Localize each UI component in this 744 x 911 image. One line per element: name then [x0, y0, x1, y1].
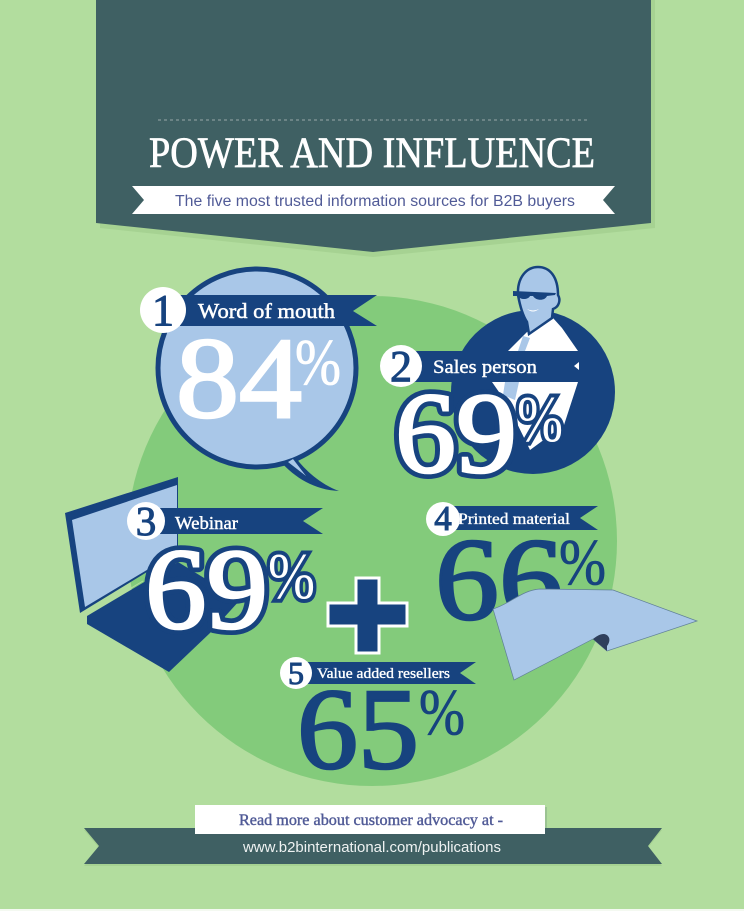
- read more box: [195, 805, 547, 836]
- value 66%: [435, 514, 606, 645]
- value 65%: [297, 666, 465, 794]
- number badge 1: [140, 286, 186, 335]
- footer link: www.b2binternational.com/publications: [242, 840, 501, 856]
- value 69%: 69: [145, 526, 268, 654]
- title: POWER AND INFLUENCE: [149, 130, 595, 177]
- ribbon label: Sales person: [433, 358, 537, 378]
- value 65%: 65: [297, 666, 419, 794]
- icon: sales person in circle: [451, 267, 615, 474]
- ribbon label: Webinar: [175, 513, 238, 533]
- item 2: sales person: [380, 267, 615, 498]
- value 69%: %: [517, 383, 563, 456]
- number badge 2: [380, 342, 422, 391]
- value 84%: 84: [176, 315, 302, 443]
- ribbon label: [180, 295, 377, 326]
- ribbon label: Value added resellers: [317, 666, 450, 682]
- large green background circle: [127, 296, 617, 786]
- value 69%: 69: [395, 370, 517, 498]
- value 69%: 69: [145, 526, 268, 654]
- read more box: Read more about customer advocacy at -: [239, 812, 503, 829]
- value 69%: %: [268, 540, 315, 613]
- ribbon label: Printed material: [458, 511, 571, 528]
- icon: plus sign: [328, 578, 407, 653]
- value 66%: 66: [435, 514, 563, 645]
- value 69%: [395, 370, 563, 498]
- number badge 5: [280, 655, 312, 691]
- number badge 1: 1: [152, 286, 174, 335]
- value 69%: [145, 526, 315, 654]
- icon: laptop: [65, 477, 240, 672]
- number badge 2: 2: [390, 342, 412, 391]
- footer ribbon: [84, 805, 662, 866]
- number badge 5: 5: [288, 655, 304, 691]
- ribbon label: [445, 506, 598, 530]
- ribbon label: [160, 508, 323, 534]
- value 69%: 69: [395, 370, 517, 498]
- number badge 3: [127, 498, 165, 544]
- number badge 3: 3: [136, 498, 156, 544]
- ribbon label: [305, 662, 476, 684]
- subtitle ribbon: [132, 186, 615, 214]
- header banner: [96, 0, 655, 257]
- ribbon label: [410, 351, 579, 382]
- value 65%: %: [419, 676, 465, 749]
- item 3: webinar: [65, 477, 323, 672]
- icon: open document: [493, 589, 697, 680]
- icon: speech bubble: [158, 269, 356, 491]
- item 5: value added resellers: [280, 655, 476, 794]
- number badge 4: 4: [434, 499, 452, 538]
- ribbon label: Word of mouth: [198, 299, 336, 323]
- item 1: word of mouth: [140, 269, 377, 491]
- value 84%: %: [295, 326, 341, 399]
- subtitle ribbon: The five most trusted information sources for B2B buyers: [175, 193, 575, 210]
- item 4: printed material: [426, 499, 697, 680]
- value 66%: %: [559, 526, 606, 599]
- number badge 4: [426, 499, 460, 538]
